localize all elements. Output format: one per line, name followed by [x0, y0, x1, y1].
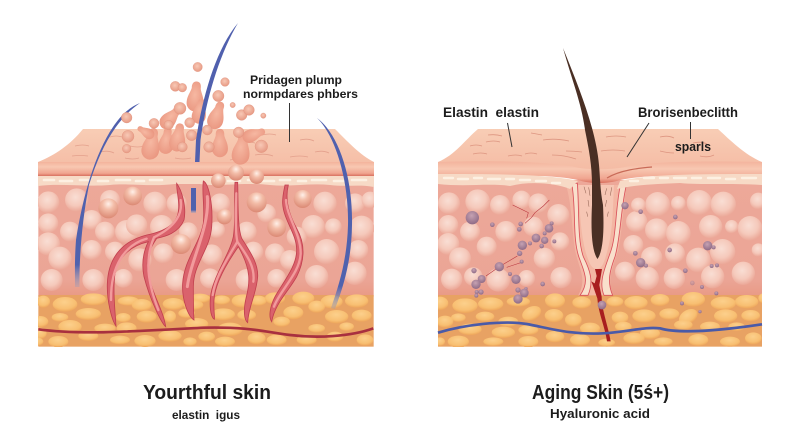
basal layer texture: [444, 178, 756, 183]
blood vessels: [107, 181, 303, 327]
blue hair right: [317, 118, 352, 309]
dermis layer with cells: [437, 180, 767, 297]
fat layer: [432, 292, 768, 348]
surface of youthful skin: [38, 129, 374, 176]
label: sparls: sparls: [675, 140, 711, 154]
subtitle: elastin igus: elastin igus: [172, 408, 240, 422]
surface wrinkles: [72, 134, 329, 160]
rising collagen blobs: [135, 81, 267, 166]
label: Elastin elastin: Elastin elastin: [443, 105, 539, 120]
hair fragment under surface: [191, 188, 196, 213]
label: normpdares phbers: normpdares phbers: [243, 87, 358, 101]
blue hair left: [75, 103, 140, 287]
epidermis band: [38, 162, 374, 176]
damaged purple particles: [466, 202, 719, 313]
cream basal layer: [38, 176, 374, 187]
panel: youthful skin cross-section: [30, 23, 378, 347]
blue vein: [438, 323, 762, 334]
epidermis band with dip: [438, 161, 762, 183]
basal layer texture: [44, 180, 366, 181]
red vein in fat layer: [38, 328, 373, 337]
aged hair: [563, 48, 603, 259]
label: Brorisenbeclitth: Brorisenbeclitth: [638, 105, 738, 120]
wrinkle fold: [607, 167, 652, 178]
collagen balls at basal layer: [211, 165, 264, 188]
leader line left panel: [288, 103, 290, 142]
fat layer: [30, 292, 374, 347]
dermis layer with cells: [37, 180, 378, 297]
panel: aging skin cross-section: [432, 48, 768, 348]
subtitle: Hyaluronic acid: Hyaluronic acid: [550, 406, 650, 421]
surface wrinkles: [470, 133, 714, 159]
rising collagen balls: [121, 62, 268, 153]
broken red vessel: [591, 269, 611, 341]
leader lines right panel: [508, 122, 690, 157]
cream basal layer: [438, 174, 762, 189]
cracks in dermis: [486, 200, 549, 276]
title: Yourthful skin: Yourthful skin: [143, 382, 271, 404]
title: Aging Skin: Aging Skin (5ś+): [532, 382, 669, 404]
surface of aging skin: [438, 129, 762, 176]
collagen balls in dermis: [98, 187, 312, 254]
blue hair centre: [195, 23, 238, 162]
hair follicle: [566, 183, 627, 295]
follicle fibres: [584, 187, 612, 217]
label: Pridagen plump: Pridagen plump: [250, 73, 342, 87]
